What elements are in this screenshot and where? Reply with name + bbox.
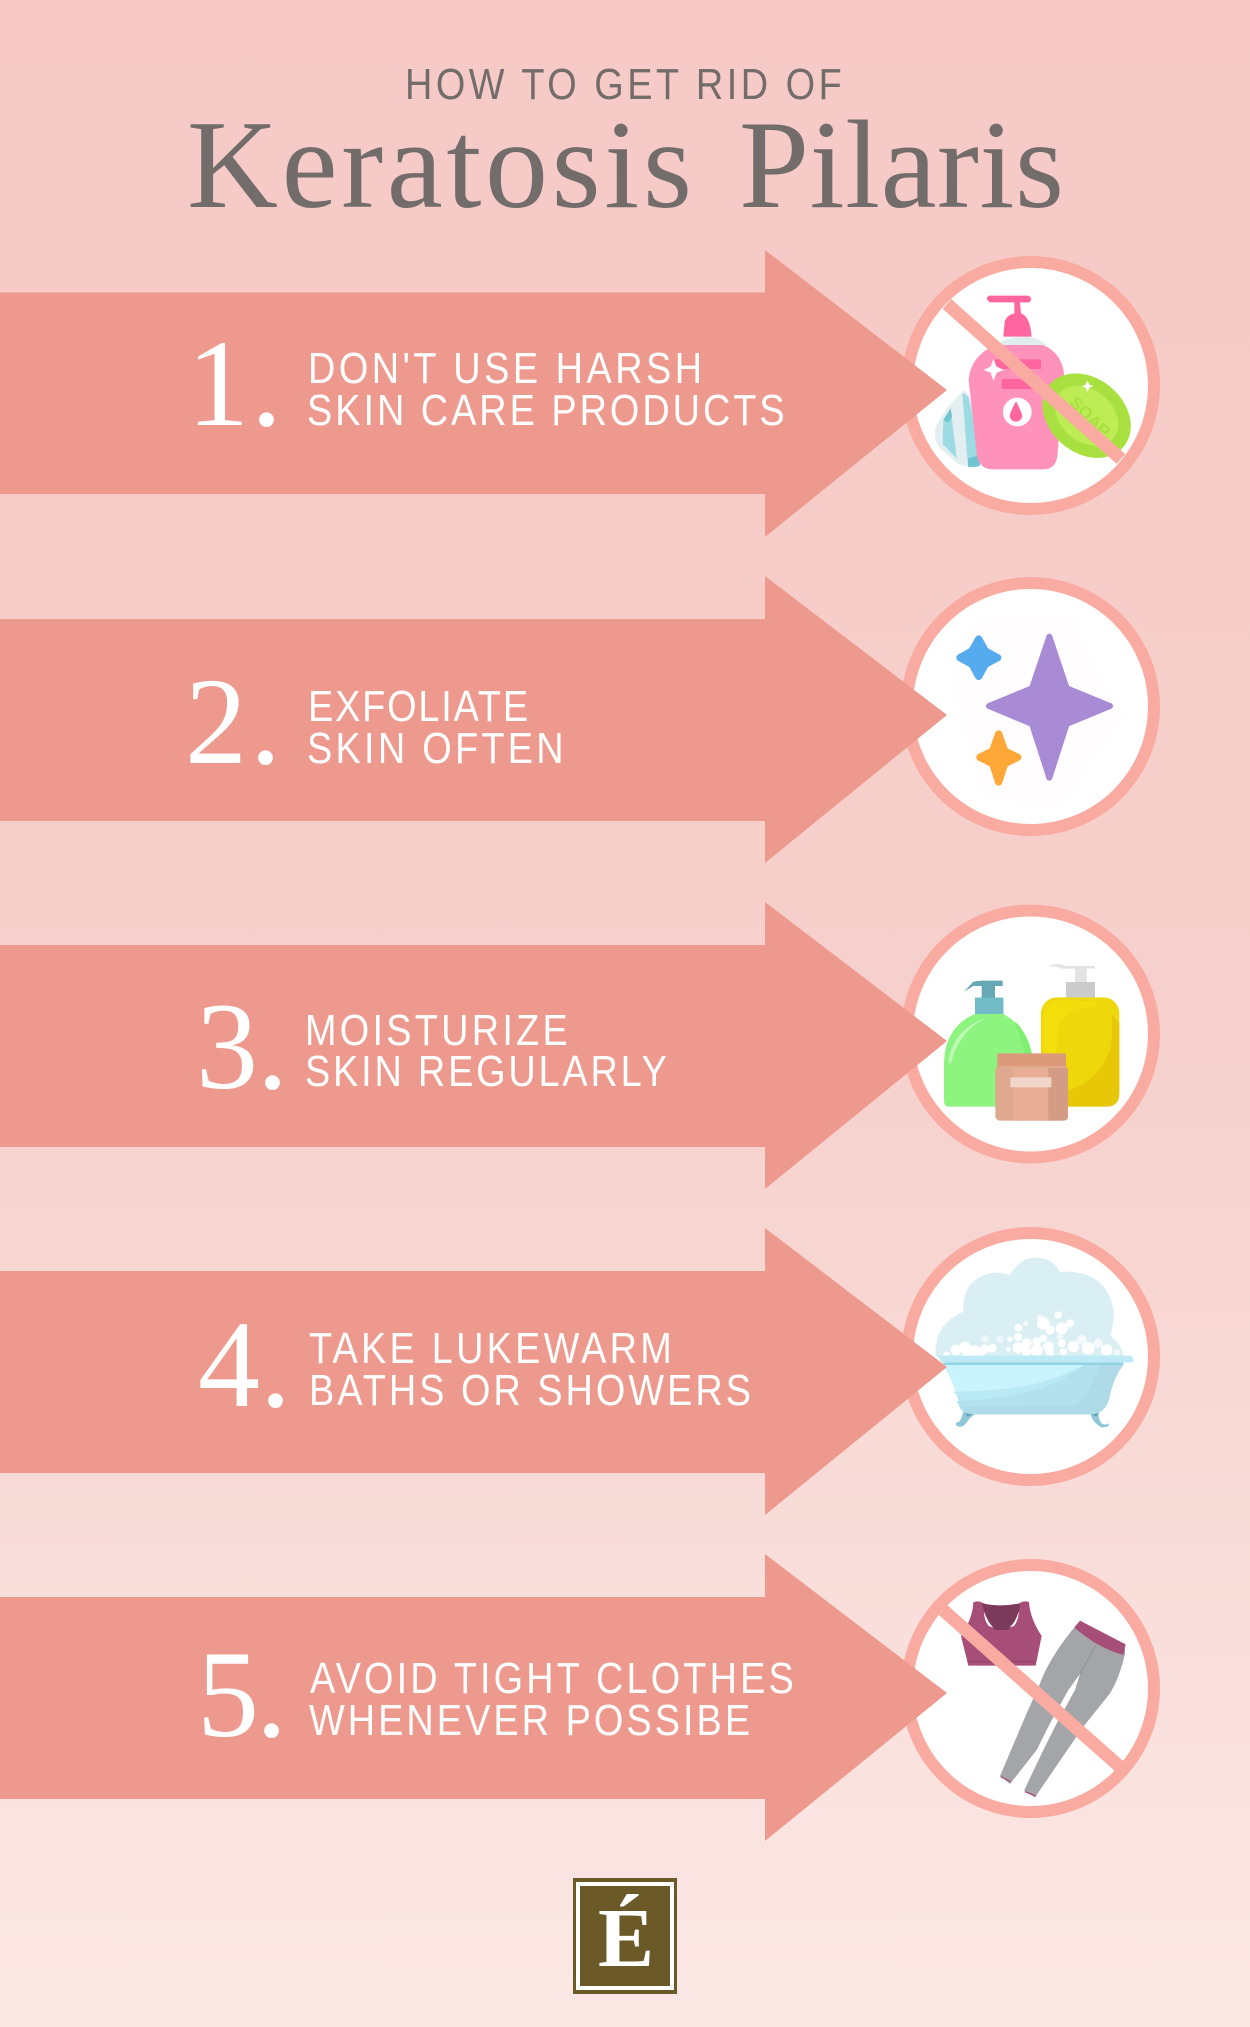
- icon artwork: three stars: [952, 613, 1128, 808]
- title: Keratosis: [187, 96, 692, 235]
- subtitle: HOW TO GET RID OF: [405, 60, 842, 109]
- step number: 5.: [197, 1626, 287, 1763]
- icon: tight clothes prohibited: [907, 1565, 1154, 1812]
- arrow shape: [0, 576, 947, 863]
- icon: moisturizer bottles: [907, 910, 1154, 1158]
- logo: [573, 1878, 677, 1994]
- step number: 1.: [187, 315, 282, 452]
- header: [187, 60, 1064, 235]
- step text: MOISTURIZE: [305, 1006, 568, 1055]
- step text: SKIN REGULARLY: [305, 1047, 667, 1096]
- step text: SKIN CARE PRODUCTS: [307, 386, 785, 435]
- icon ring: [907, 262, 1154, 509]
- step text: [307, 682, 564, 773]
- arrow: step 1: [0, 250, 947, 537]
- icon artwork: tub with foam: [935, 1258, 1133, 1427]
- step number: 3.: [196, 978, 288, 1115]
- logo: É: [598, 1892, 654, 1985]
- icon artwork: puff, bottle and soap: [935, 296, 1148, 475]
- step text: DON'T USE HARSH: [308, 344, 702, 393]
- prohibition slash: [943, 1610, 1119, 1766]
- step text: SKIN OFTEN: [307, 724, 564, 773]
- arrow shape: [0, 250, 947, 537]
- title: Pilaris: [739, 96, 1064, 235]
- icon artwork: bottles and jar: [944, 964, 1119, 1121]
- icon: bathtub: [907, 1233, 1154, 1480]
- step number: 2.: [185, 653, 281, 790]
- step number: 4.: [198, 1296, 291, 1433]
- arrow shape: [0, 1554, 947, 1841]
- step text: BATHS OR SHOWERS: [309, 1366, 751, 1415]
- step text: EXFOLIATE: [308, 682, 528, 731]
- step text: [309, 1324, 751, 1415]
- icon ring: [907, 583, 1154, 830]
- icon artwork: puff, bottle and soap: SOAP: [1066, 392, 1114, 441]
- arrow shape: [0, 1228, 947, 1515]
- icon artwork: sports bra and leggings: [961, 1601, 1126, 1797]
- step text: [305, 1006, 667, 1096]
- icon ring: [907, 910, 1154, 1158]
- step text: [307, 344, 785, 435]
- arrow: step 3: [0, 902, 947, 1189]
- icon: skin care products prohibited: [907, 262, 1154, 509]
- step text: WHENEVER POSSIBE: [309, 1696, 750, 1745]
- icon ring: [907, 1233, 1154, 1480]
- step text: [309, 1654, 794, 1745]
- prohibition slash: [947, 304, 1121, 459]
- arrow: step 4: [0, 1228, 947, 1515]
- arrow shape: [0, 902, 947, 1189]
- step text: AVOID TIGHT CLOTHES: [310, 1654, 794, 1703]
- icon ring: [907, 1565, 1154, 1812]
- arrow: step 2: [0, 576, 947, 863]
- step text: TAKE LUKEWARM: [309, 1324, 672, 1373]
- arrow: step 5: [0, 1554, 947, 1841]
- icon: sparkles: [907, 583, 1154, 830]
